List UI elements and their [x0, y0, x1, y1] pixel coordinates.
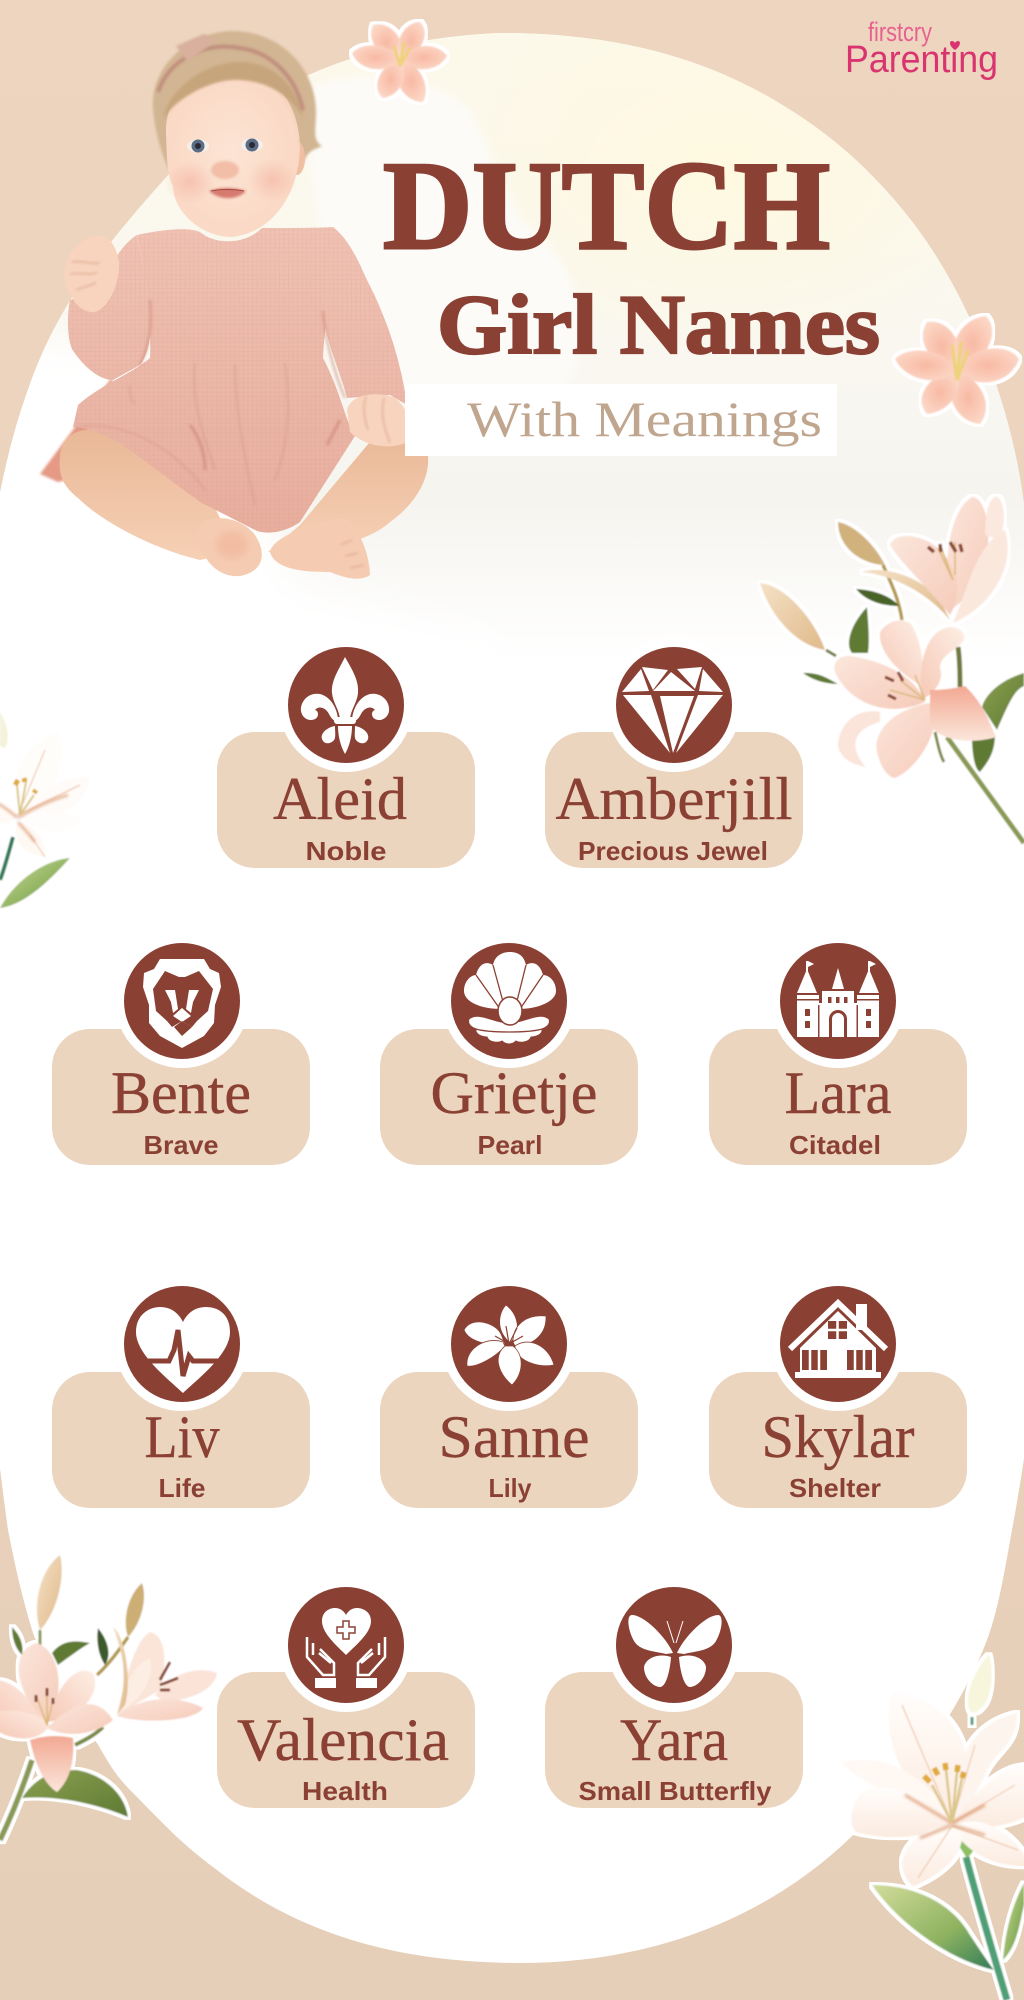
name: Amberjill: [556, 766, 792, 832]
icon: hands holding heart: [279, 1578, 413, 1712]
icon: heart with pulse: [115, 1277, 249, 1411]
card background: [709, 1029, 967, 1165]
card background: [217, 1672, 475, 1808]
name: Liv: [144, 1404, 220, 1470]
meaning: Pearl: [478, 1130, 542, 1160]
meaning: Citadel: [789, 1130, 881, 1160]
meaning: Brave: [144, 1130, 218, 1160]
card: Aleid: [217, 638, 475, 868]
icon: house: [771, 1277, 905, 1411]
name: Bente: [111, 1060, 251, 1126]
meaning: Noble: [306, 836, 386, 866]
logo: firstcry parenting: Parenting: [845, 39, 998, 81]
name: Lara: [784, 1060, 892, 1126]
icon: lion: [115, 934, 249, 1068]
name: Aleid: [273, 766, 407, 832]
card background: [52, 1372, 310, 1508]
subtitle: With Meanings: [405, 384, 837, 456]
name: Yara: [620, 1707, 728, 1773]
card background: [217, 732, 475, 868]
icon: castle: [771, 934, 905, 1068]
meaning: Health: [302, 1776, 388, 1806]
card: Yara: [545, 1578, 803, 1808]
flower: right lily branch: [760, 497, 1024, 843]
card background: [380, 1029, 638, 1165]
card background: [545, 732, 803, 868]
card background: [52, 1029, 310, 1165]
name: Valencia: [237, 1707, 449, 1773]
icon: pearl shell: [442, 934, 576, 1068]
name: Sanne: [438, 1404, 590, 1470]
card background: [380, 1372, 638, 1508]
title: DUTCH: DUTCH: [383, 137, 830, 276]
name: Grietje: [430, 1060, 598, 1126]
logo: firstcry parenting: firstcry: [868, 17, 932, 47]
baby photo illustration: [40, 31, 428, 579]
title: Girl Names: Girl Names: [437, 278, 880, 372]
name: Skylar: [762, 1404, 915, 1470]
meaning: Lily: [488, 1473, 532, 1503]
icon: butterfly: [607, 1578, 741, 1712]
flower: bottom-left lily branch: [0, 1555, 217, 1840]
card background: [709, 1372, 967, 1508]
flower: right small lily: [895, 316, 1019, 424]
icon: fleur-de-lis: [279, 638, 413, 772]
card: Bente: [52, 934, 310, 1165]
meaning: Shelter: [789, 1473, 881, 1503]
card: Lara: [709, 934, 967, 1165]
card: Grietje: [380, 934, 638, 1165]
flower: left white lily: [0, 712, 90, 908]
logo: firstcry parenting: [845, 17, 998, 81]
subtitle: With Meanings: With Meanings: [467, 391, 822, 447]
icon: diamond: [607, 638, 741, 772]
flower: bottom-right white lily: [842, 1655, 1024, 2000]
meaning: Life: [158, 1473, 206, 1503]
icon: lily: [442, 1277, 576, 1411]
card: Sanne: [380, 1277, 638, 1508]
meaning: Precious Jewel: [578, 836, 768, 866]
flower: top small lily: [352, 22, 447, 102]
card: Skylar: [709, 1277, 967, 1508]
card: Amberjill: [545, 638, 803, 868]
meaning: Small Butterfly: [578, 1776, 772, 1806]
card: Valencia: [217, 1578, 475, 1808]
card background: [545, 1672, 803, 1808]
card: Liv: [52, 1277, 310, 1508]
